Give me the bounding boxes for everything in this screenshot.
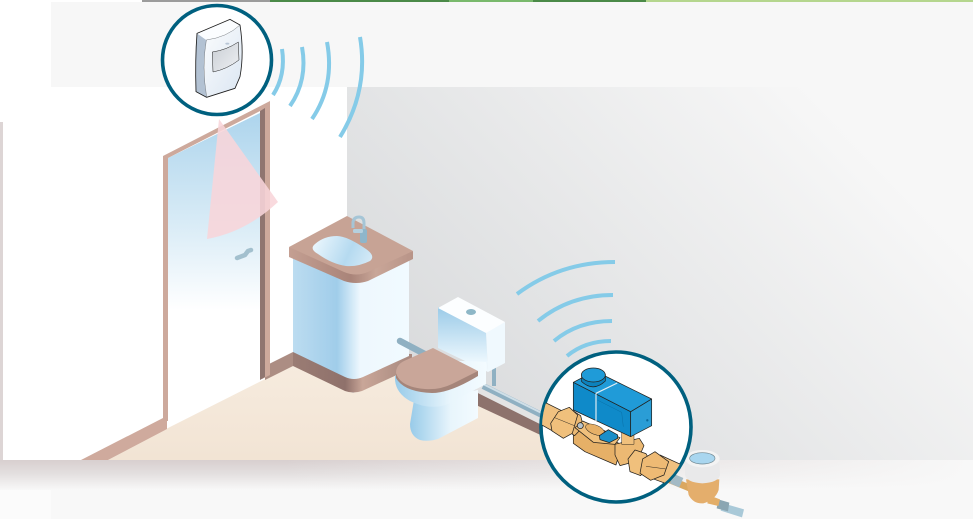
bowl foot — [410, 390, 478, 441]
floor — [108, 365, 560, 460]
lower valve body — [572, 432, 619, 466]
motion sensor device — [196, 19, 242, 97]
signal waves: sensor — [273, 37, 362, 137]
countertop side — [289, 247, 413, 283]
plug — [646, 419, 648, 421]
stem — [622, 431, 634, 444]
door glass panel — [168, 112, 262, 423]
door — [163, 101, 270, 423]
sensor top face — [197, 19, 240, 40]
toilet — [395, 297, 505, 441]
left hex facet — [555, 418, 574, 426]
door frame — [163, 101, 270, 421]
sensor side — [196, 33, 207, 97]
wall pipe to the left of the toilet — [400, 341, 436, 360]
meter collar — [685, 459, 720, 483]
callout circle: valve — [541, 352, 691, 502]
tank right face — [486, 322, 505, 372]
sensor outline — [196, 19, 242, 97]
outlet pipe — [721, 503, 744, 517]
right flange — [615, 438, 644, 466]
left coupling — [572, 410, 582, 436]
blue tab — [599, 430, 618, 443]
cap side — [582, 374, 605, 387]
brass stub — [707, 495, 720, 506]
baseboard: behind the door — [265, 352, 293, 380]
solenoid panel line — [597, 400, 623, 427]
signal waves: valve — [517, 262, 615, 356]
tank button — [466, 309, 476, 315]
tank lid — [438, 297, 505, 333]
inlet pipe — [665, 475, 692, 492]
top plate — [575, 421, 620, 444]
seat edge — [396, 371, 478, 393]
cap top — [581, 368, 605, 382]
right hex facet — [646, 466, 666, 469]
background band: bottom with shadow — [0, 460, 973, 519]
sensor lens — [212, 42, 239, 72]
sensor detection cone — [207, 119, 278, 239]
faucet — [353, 217, 367, 243]
seat lid — [396, 348, 478, 389]
water meter — [665, 450, 744, 517]
inlet nut — [670, 473, 683, 487]
sensor front — [197, 19, 242, 97]
countertop top — [289, 216, 413, 274]
solenoid top face — [573, 371, 652, 412]
callout circle: sensor — [162, 6, 272, 114]
tank left face — [438, 307, 488, 372]
top colour strip — [142, 0, 973, 2]
white band — [596, 383, 617, 421]
back wall — [347, 87, 973, 460]
sink unit — [289, 216, 413, 392]
sensor led — [225, 43, 229, 45]
cabinet body — [293, 255, 409, 379]
basin — [313, 236, 372, 266]
sensor front edge — [204, 25, 240, 97]
dome — [585, 424, 604, 436]
meter dial — [690, 453, 715, 464]
right pipe — [654, 454, 680, 484]
right hex nut inner — [628, 450, 651, 476]
bolt — [577, 423, 583, 429]
solenoid valve — [542, 368, 680, 484]
outlet nut — [717, 499, 729, 511]
solenoid end face — [631, 399, 652, 437]
left edge strip — [0, 122, 3, 460]
background band: top — [51, 2, 973, 87]
left pipe — [542, 402, 562, 431]
cabinet base — [293, 352, 412, 392]
meter top ring — [685, 450, 720, 467]
door handle — [237, 250, 251, 258]
meter body — [686, 479, 719, 503]
left hex nut — [551, 407, 578, 438]
right hex nut outer — [640, 452, 669, 480]
baseboard: left — [81, 418, 167, 460]
door frame shade — [260, 108, 265, 380]
bowl rim — [395, 360, 486, 407]
baseboard: right — [476, 367, 560, 444]
solenoid front face — [573, 382, 631, 437]
